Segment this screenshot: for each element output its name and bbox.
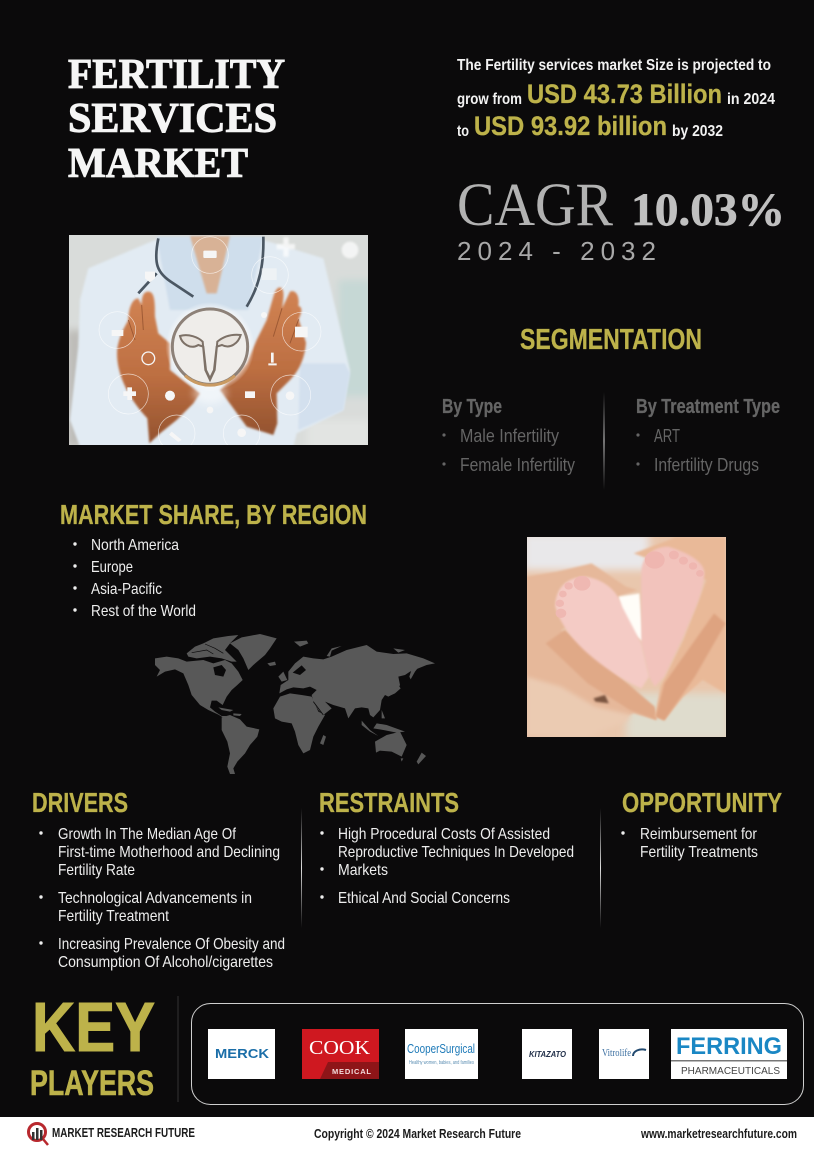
market size statement: USD 93.92 billion — [474, 111, 667, 141]
drivers list: Growth In The Median Age Of — [58, 826, 236, 843]
heading: key players: PLAYERS — [30, 1064, 154, 1103]
drivers list: First-time Motherhood and Declining — [58, 844, 280, 861]
ring — [172, 309, 248, 384]
segmentation: by treatment type — [636, 396, 780, 475]
restraints list: Ethical And Social Concerns — [338, 890, 510, 907]
heading: restraints: RESTRAINTS — [319, 787, 459, 818]
right hand — [634, 537, 726, 720]
right foot — [641, 547, 704, 687]
logo: coopersurgical — [405, 1029, 478, 1079]
heading: segmentation: SEGMENTATION — [520, 324, 702, 356]
blurred backdrop — [523, 533, 729, 740]
market size statement: to — [457, 123, 469, 140]
logo: kitazato: KITAZATO — [529, 1050, 567, 1059]
market size statement — [457, 57, 775, 141]
segmentation: by treatment type: ART — [654, 426, 680, 446]
CAGR: 2024 - 2032 — [457, 236, 656, 266]
market size statement: USD 43.73 Billion — [527, 79, 722, 109]
segmentation: by treatment type: Infertility Drugs — [654, 455, 759, 475]
market size statement: in 2024 — [727, 91, 775, 108]
title — [68, 52, 285, 187]
region list: Asia-Pacific — [91, 581, 162, 598]
segmentation: by type: Female Infertility — [460, 455, 575, 475]
logo: market research future: MARKET RESEARCH FUTURE — [52, 1126, 195, 1140]
opportunity list — [621, 826, 758, 861]
footer — [0, 1117, 814, 1150]
market size statement: The Fertility services market Size is projected to — [457, 57, 771, 74]
drivers list: Fertility Treatment — [58, 908, 169, 925]
logo: merck: MERCK — [215, 1046, 270, 1061]
left hand — [526, 563, 657, 737]
logo: cook medical — [302, 1029, 379, 1079]
region list: North America — [91, 537, 179, 554]
glare crosses — [277, 237, 358, 258]
logo: coopersurgical: CooperSurgical — [407, 1041, 475, 1056]
logo: merck — [208, 1029, 275, 1079]
drivers list: Increasing Prevalence Of Obesity and — [58, 936, 285, 953]
backdrop tones — [67, 280, 372, 450]
CAGR: CAGR — [457, 172, 613, 239]
logo: vitrolife: Vitrolife — [602, 1048, 631, 1059]
key players logo panel — [192, 1004, 804, 1104]
market size statement: grow from — [457, 91, 522, 108]
photo: baby feet in hands — [523, 533, 729, 740]
heading: key players — [30, 988, 155, 1103]
segmentation: by type — [442, 396, 575, 475]
segmentation: by treatment type: By Treatment Type — [636, 396, 780, 418]
copyright: Copyright © 2024 Market Research Future — [314, 1127, 521, 1141]
CAGR: 10.03% — [631, 184, 785, 236]
heading: market share by region: MARKET SHARE, BY REGION — [60, 499, 367, 530]
glow — [165, 302, 255, 391]
CAGR — [457, 172, 785, 266]
logo: cook medical: COOK — [309, 1037, 371, 1059]
heading: key players: KEY — [32, 988, 155, 1066]
title: MARKET — [68, 141, 248, 187]
opportunity list: Reimbursement for — [640, 826, 758, 843]
right hand — [220, 287, 306, 435]
logo: ferring — [671, 1029, 787, 1079]
coat — [70, 240, 350, 447]
world map — [155, 634, 435, 774]
restraints list — [320, 826, 574, 907]
restraints list: Markets — [338, 862, 388, 879]
opportunity list: Fertility Treatments — [640, 844, 758, 861]
title: SERVICES — [68, 96, 277, 142]
drivers list: Consumption Of Alcohol/cigarettes — [58, 954, 273, 971]
market size statement: by 2032 — [672, 123, 723, 140]
uterus icon — [180, 335, 241, 380]
logo: cook medical: MEDICAL — [332, 1067, 371, 1076]
segmentation: by type: Male Infertility — [460, 426, 559, 446]
drivers list — [39, 826, 285, 971]
region list: Europe — [91, 559, 133, 576]
heading: drivers: DRIVERS — [32, 787, 128, 818]
region list: Rest of the World — [91, 603, 196, 620]
logo: kitazato — [522, 1029, 572, 1079]
logo: vitrolife — [599, 1029, 649, 1079]
finger creases — [128, 305, 299, 343]
drivers list: Fertility Rate — [58, 862, 135, 879]
small icons — [112, 251, 308, 442]
left foot — [555, 576, 649, 688]
drivers list: Technological Advancements in — [58, 890, 252, 907]
restraints list: Reproductive Techniques In Developed — [338, 844, 574, 861]
region list — [73, 537, 196, 620]
logo: market research future — [28, 1124, 195, 1145]
gap light — [618, 593, 643, 642]
icon rings — [99, 237, 321, 452]
photo: doctor holding uterus icon — [67, 235, 372, 452]
logo: ferring: FERRING — [676, 1033, 782, 1060]
stethoscope — [138, 237, 263, 307]
logo: coopersurgical: Healthy women, babies, and families — [409, 1060, 474, 1066]
logo: ferring: PHARMACEUTICALS — [681, 1065, 780, 1077]
title: FERTILITY — [68, 52, 285, 98]
segmentation: by type: By Type — [442, 396, 502, 418]
left hand — [117, 292, 200, 443]
restraints list: High Procedural Costs Of Assisted — [338, 826, 550, 843]
